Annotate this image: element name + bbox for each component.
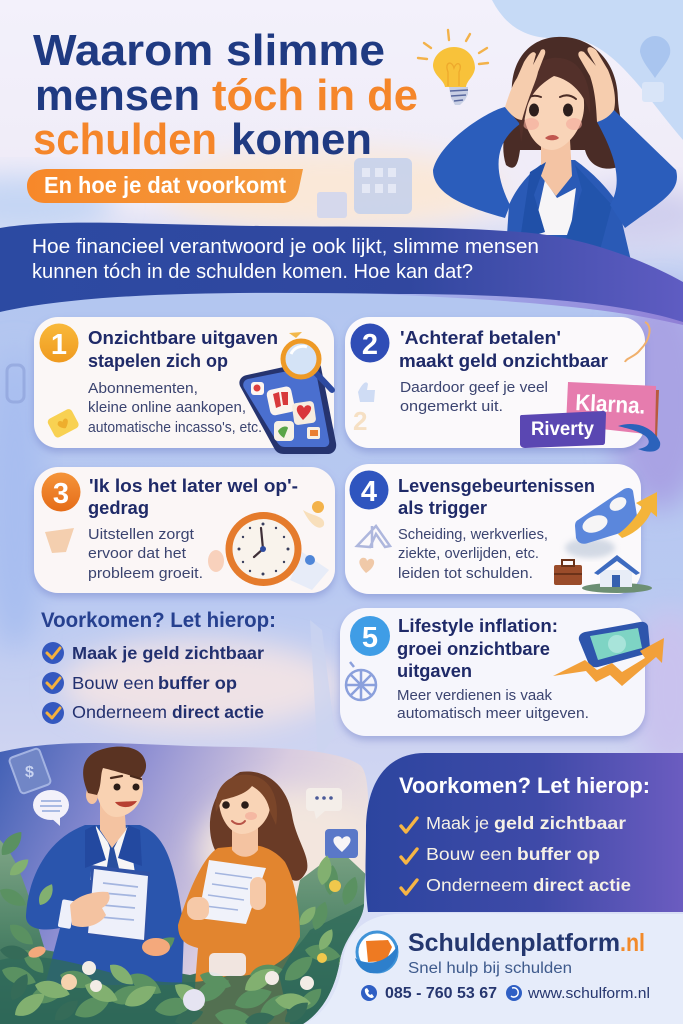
subtitle pill: En hoe je dat voorkomt xyxy=(44,172,286,198)
title: mensen xyxy=(35,71,200,120)
item 2: Bouw een xyxy=(426,844,512,864)
check item 2: Bouw een xyxy=(72,673,154,693)
woman xyxy=(178,772,307,1024)
item 1: Maak je xyxy=(426,813,489,833)
number badge 2 xyxy=(350,324,390,362)
heading 1: stapelen zich op xyxy=(88,350,228,371)
title: tóch in de xyxy=(212,71,418,120)
heading 3: gedrag xyxy=(88,497,149,518)
body text 2: ongemerkt uit. xyxy=(400,399,503,415)
panel: voorkomen (right) xyxy=(366,753,683,912)
illustration: couple in garden xyxy=(0,735,380,1024)
illustration: stressed woman xyxy=(433,37,677,265)
panel: contact footer xyxy=(305,913,683,1024)
body text 1: kleine online aankopen, xyxy=(88,400,246,416)
item 3: direct actie xyxy=(533,875,631,895)
icon: faded thumbs xyxy=(353,382,375,436)
heading 4 xyxy=(398,475,595,518)
logo: Klarna: Klarna. xyxy=(575,389,646,419)
heading 2: maakt geld onzichtbaar xyxy=(399,350,608,371)
number badge 2: 2 xyxy=(362,329,378,361)
icon: faded thumbs: 2 xyxy=(353,406,367,436)
icon: cloud tile and rising arrow xyxy=(565,488,657,558)
icon: briefcase xyxy=(554,560,582,585)
check item 3: direct actie xyxy=(172,702,264,722)
logo: Klarna xyxy=(566,382,659,438)
body text 4 xyxy=(398,527,548,582)
intro band: kunnen tóch in de schulden komen. Hoe kan dat? xyxy=(32,261,473,283)
intro band xyxy=(0,223,683,325)
body text 4: ziekte, overlijden, etc. xyxy=(398,546,539,562)
icon: phone and magnifier xyxy=(239,332,336,454)
title: komen xyxy=(231,115,372,164)
heading 1: Onzichtbare uitgaven xyxy=(88,327,278,348)
item 2: buffer op xyxy=(517,844,600,864)
card 3: later wel oplossen xyxy=(34,467,335,593)
icon: dollar card: $ xyxy=(25,764,34,781)
body text 2 xyxy=(400,380,548,415)
heading 5: uitgaven xyxy=(397,660,472,681)
check item 3: Onderneem xyxy=(72,702,167,722)
brand name: Schuldenplatform xyxy=(408,929,620,957)
check item 2 xyxy=(42,672,237,694)
body text 1 xyxy=(88,381,262,436)
body text 4: Scheiding, werkverlies, xyxy=(398,527,548,543)
card 4: levensgebeurtenissen xyxy=(345,464,657,594)
item 3 xyxy=(401,875,631,895)
brand name: .nl xyxy=(620,929,645,957)
number badge 5: 5 xyxy=(362,622,378,654)
icon: hearts xyxy=(359,558,374,573)
title: Waarom slimme xyxy=(33,26,385,75)
item 2 xyxy=(401,844,600,864)
panel heading: Voorkomen? Let hierop: xyxy=(399,773,650,798)
body text 3: probleem groeit. xyxy=(88,566,203,582)
number badge 4 xyxy=(350,470,388,510)
icon: speech bubble right xyxy=(306,788,342,819)
icon: stopwatch xyxy=(346,662,376,700)
body text 5: automatisch meer uitgeven. xyxy=(397,706,589,722)
heading 2: 'Achteraf betalen' xyxy=(400,327,561,348)
heading 3: 'Ik los het later wel op'- xyxy=(89,475,298,496)
number badge 3: 3 xyxy=(53,478,69,510)
phone number: 085 - 760 53 67 xyxy=(385,985,497,1002)
checklist heading: Voorkomen? Let hierop: xyxy=(41,609,276,632)
item 1: geld zichtbaar xyxy=(494,813,626,833)
body text 5 xyxy=(397,688,589,722)
item 3: Onderneem xyxy=(426,875,528,895)
body text 3 xyxy=(88,527,203,582)
heading 5: groei onzichtbare xyxy=(397,638,550,659)
card 2: achteraf betalen xyxy=(345,317,660,452)
check item 2: buffer op xyxy=(158,673,237,693)
icon: decorative note xyxy=(45,528,74,553)
heading 3 xyxy=(88,475,298,518)
man xyxy=(26,747,184,985)
logo icon xyxy=(355,932,398,973)
body text 1: Abonnementen, xyxy=(88,381,198,397)
heading 4: als trigger xyxy=(398,497,487,518)
number badge 5 xyxy=(350,616,390,656)
check item 3 xyxy=(42,702,264,724)
icon: banknote and rising arrow xyxy=(553,622,664,686)
number badge 3 xyxy=(42,472,80,512)
icon: speech bubble left xyxy=(33,790,69,826)
tagline: Snel hulp bij schulden xyxy=(408,960,572,977)
heading 2 xyxy=(399,327,608,371)
title xyxy=(33,26,418,164)
item 1 xyxy=(401,813,626,833)
body text 3: ervoor dat het xyxy=(88,546,186,562)
check item 1: Maak je geld zichtbaar xyxy=(72,643,264,663)
body text 1: automatische incasso's, etc. xyxy=(88,420,262,436)
number badge 4: 4 xyxy=(361,476,377,508)
card 5: lifestyle inflation xyxy=(340,608,664,736)
icon: hook xyxy=(625,322,650,362)
icon: dollar card xyxy=(8,748,52,794)
icon: light bulb xyxy=(418,30,488,105)
website: www.schulform.nl xyxy=(527,986,650,1002)
intro band: Hoe financieel verantwoord je ook lijkt, slimme mensen xyxy=(32,236,539,258)
icon: heart tile xyxy=(325,829,358,858)
icon: blue ribbon xyxy=(618,424,660,452)
number badge 1 xyxy=(40,324,78,362)
body text 2: Daardoor geef je veel xyxy=(400,380,548,396)
body text 5: Meer verdienen is vaak xyxy=(397,688,553,704)
body text 4: leiden tot schulden. xyxy=(398,566,533,582)
heading 1 xyxy=(88,327,278,371)
logo: Riverty xyxy=(520,411,606,448)
icon: yellow envelope xyxy=(46,408,80,439)
heading 4: Levensgebeurtenissen xyxy=(398,475,595,496)
logo: Riverty: Riverty xyxy=(531,419,594,440)
number badge 1: 1 xyxy=(51,329,67,361)
garden foliage xyxy=(0,828,372,1024)
body text 3: Uitstellen zorgt xyxy=(88,527,194,543)
icon: clock xyxy=(208,501,329,590)
card 1: onzichtbare uitgaven xyxy=(34,317,336,454)
checklist: voorkomen (left) xyxy=(41,609,276,724)
heading 5 xyxy=(397,615,558,681)
icon: house xyxy=(582,555,652,593)
title: schulden xyxy=(33,115,217,164)
heading 5: Lifestyle inflation: xyxy=(398,615,558,636)
icon: scales xyxy=(357,526,390,548)
